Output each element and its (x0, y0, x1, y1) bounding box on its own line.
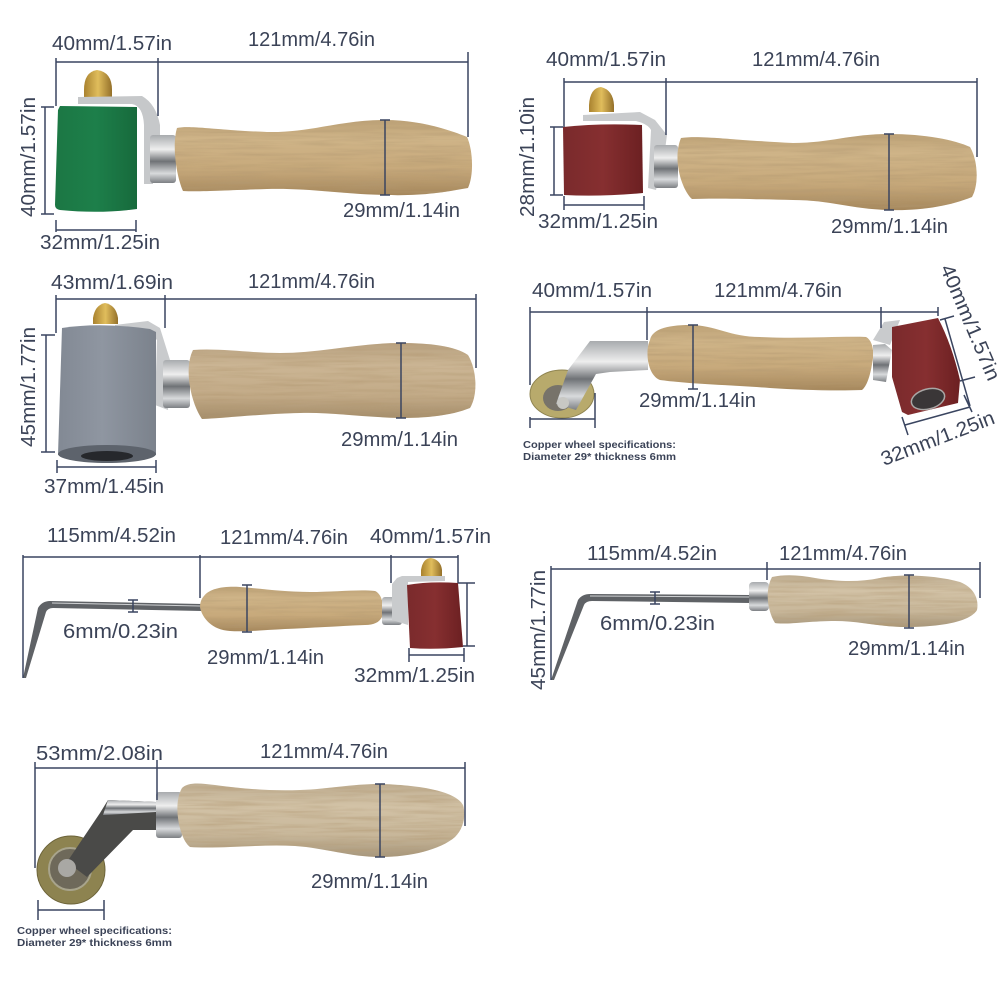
dimensions (35, 760, 465, 920)
roller hole (81, 451, 133, 461)
rod highlight (590, 596, 750, 597)
maroon roller (892, 318, 960, 415)
dimensions (551, 562, 980, 680)
dimensions (550, 78, 977, 210)
tool 1: green roller: 121mm/4.76in (248, 29, 375, 51)
bracket (583, 112, 667, 190)
tool 4: double-end roller: 29mm/1.14in (639, 390, 756, 412)
tool 1: green roller: 29mm/1.14in (343, 200, 460, 222)
wheel bearing (543, 385, 573, 411)
tool 2: maroon roller: 121mm/4.76in (752, 49, 880, 71)
tool 2: maroon roller: 28mm/1.10in (517, 97, 539, 217)
hook rod (551, 594, 750, 680)
nut (421, 558, 442, 577)
ferrule (150, 135, 176, 183)
tool 5: hook and roller: 32mm/1.25in (354, 665, 475, 687)
tool 3: grey roller (18, 271, 476, 498)
tool 7: copper wheel roller: 121mm/4.76in (260, 741, 388, 763)
maroon roller body (563, 124, 643, 196)
nut (84, 70, 112, 97)
tool 4: double-end roller: 121mm/4.76in (714, 280, 842, 302)
labels: 40mm/1.57in (532, 280, 652, 302)
tool 6: hook tool: 45mm/1.77in (528, 570, 550, 690)
ferrule (654, 145, 678, 188)
bracket (115, 321, 170, 410)
labels: 53mm/2.08in (36, 743, 163, 765)
tool 7: copper wheel roller (17, 741, 465, 949)
nut (589, 87, 614, 112)
arm (67, 800, 156, 877)
tool 5: hook and roller: 29mm/1.14in (207, 647, 324, 669)
wood handle (177, 783, 464, 857)
wood handle (768, 575, 977, 627)
tool 5: hook and roller: 121mm/4.76in (220, 527, 348, 549)
ferrule (163, 360, 190, 408)
labels: 115mm/4.52in (587, 543, 717, 565)
tool 4: double-end roller: 32mm/1.25in (878, 407, 998, 471)
tool 4: double-end roller: Diameter 29* thickness 6mm (523, 451, 676, 463)
tool 3: grey roller: 121mm/4.76in (248, 271, 375, 293)
tool 5: hook and roller: 40mm/1.57in (370, 526, 491, 548)
dimensions (41, 294, 476, 473)
nut (93, 303, 118, 324)
wheel bearing (49, 848, 91, 890)
hook rod (23, 601, 202, 678)
tool 4: double-end roller (523, 261, 1000, 471)
tool 2: maroon roller: 32mm/1.25in (538, 211, 658, 233)
tool 7: copper wheel roller: Diameter 29* thickness 6mm (17, 937, 172, 949)
tool 3: grey roller: 45mm/1.77in (18, 327, 40, 447)
tool 6: hook tool (528, 543, 980, 690)
tool 3: grey roller: 37mm/1.45in (44, 476, 164, 498)
tool 1: green roller: 32mm/1.25in (40, 232, 160, 254)
ferrule (749, 582, 769, 611)
ferrule (382, 597, 402, 625)
tool 1: green roller: 40mm/1.57in (18, 97, 40, 217)
tool 1: green roller (18, 29, 472, 254)
wood handle (677, 134, 977, 210)
rod highlight (52, 603, 200, 606)
tool 6: hook tool: 6mm/0.23in (600, 613, 715, 635)
green roller body (55, 106, 137, 212)
tool 6: hook tool: 121mm/4.76in (779, 543, 907, 565)
tool 2: maroon roller: 29mm/1.14in (831, 216, 948, 238)
arm highlight (103, 800, 156, 815)
maroon roller (407, 582, 463, 649)
bolt head (58, 859, 76, 877)
bracket arm (873, 320, 900, 345)
labels: 40mm/1.57in (52, 33, 172, 55)
copper wheel (37, 836, 105, 904)
labels: 115mm/4.52in (47, 525, 176, 547)
tool 2: maroon roller (517, 49, 977, 238)
dimensions (41, 52, 468, 232)
bracket (392, 576, 445, 625)
tool 7: copper wheel roller: Copper wheel specifications: (17, 925, 172, 937)
dimensions (23, 555, 475, 678)
tool 7: copper wheel roller: 29mm/1.14in (311, 871, 428, 893)
tool 3: grey roller: 29mm/1.14in (341, 429, 458, 451)
wood handle (189, 343, 475, 419)
tool 5: hook and roller (23, 525, 491, 687)
copper wheel (530, 370, 594, 418)
wood handle (647, 325, 873, 390)
roller bearing (909, 385, 947, 413)
wood handle (175, 120, 472, 195)
tool 6: hook tool: 29mm/1.14in (848, 638, 965, 660)
tool 5: hook and roller: 6mm/0.23in (63, 621, 178, 643)
bolt head (557, 397, 569, 409)
ferrule and bracket (873, 344, 892, 382)
grey roller body (58, 325, 156, 455)
bracket (78, 96, 160, 184)
dimensions (530, 307, 975, 435)
tool 4: double-end roller: 40mm/1.57in (935, 261, 1000, 384)
tool 4: double-end roller: Copper wheel specifications: (523, 439, 676, 451)
roller end face (58, 445, 156, 463)
labels: 40mm/1.57in (546, 49, 666, 71)
arm (556, 341, 648, 410)
labels: 43mm/1.69in (51, 272, 173, 294)
wood handle (200, 587, 383, 631)
ferrule (156, 792, 182, 838)
